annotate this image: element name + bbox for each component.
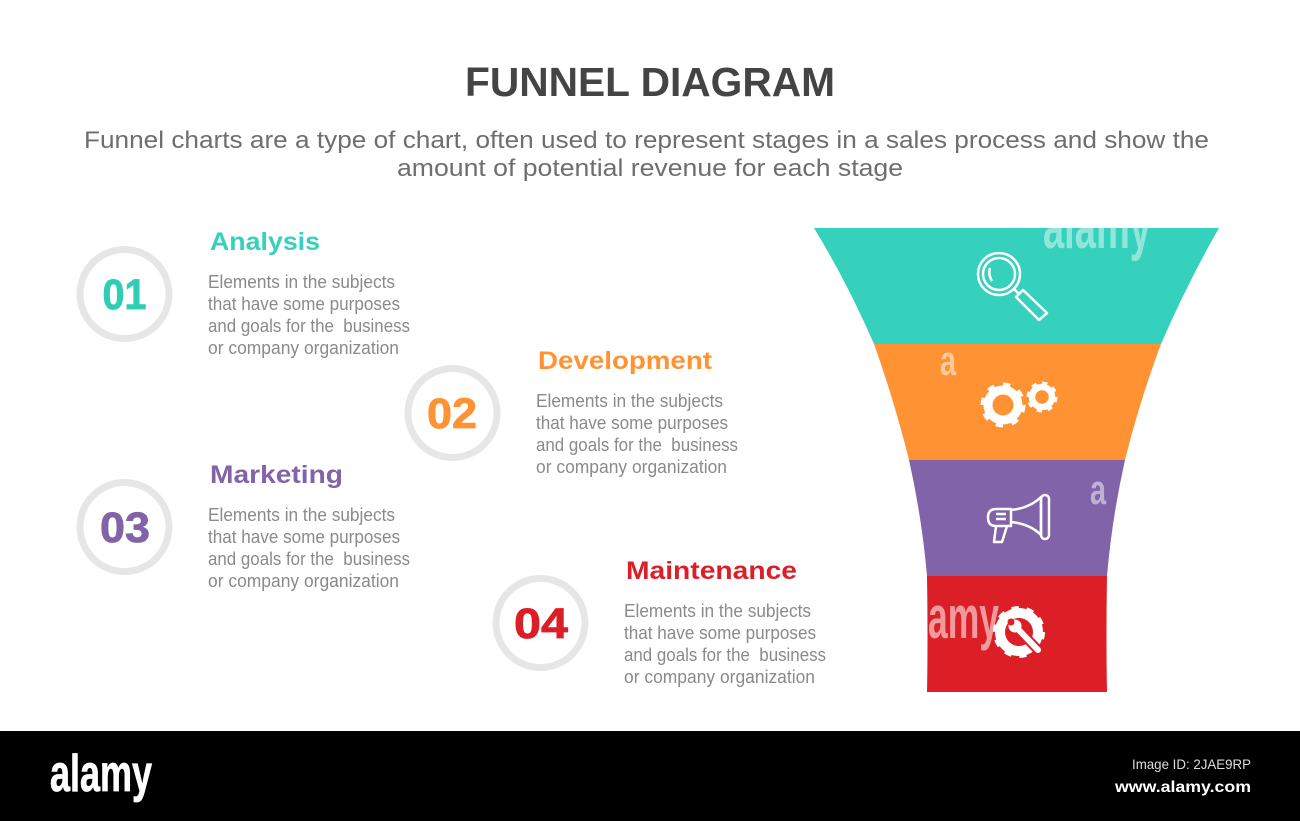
heading: marketing: Marketing (210, 461, 343, 489)
description 01: Elements in the subjects (208, 272, 395, 292)
description 03: and goals for the business (208, 549, 410, 569)
description 02: that have some purposes (536, 413, 728, 433)
description 04: that have some purposes (624, 623, 816, 643)
heading: maintenance: Maintenance (626, 557, 797, 585)
website: www.alamy.com (1114, 779, 1251, 796)
description 03: Elements in the subjects (208, 505, 395, 525)
description 02: or company organization (536, 457, 727, 477)
title: FUNNEL DIAGRAM (465, 59, 835, 105)
watermark letter on purple segment: a (1090, 466, 1106, 513)
number badge 04 (496, 578, 585, 668)
description 04: and goals for the business (624, 645, 826, 665)
item 01: analysis (80, 228, 410, 358)
heading: analysis: Analysis (210, 228, 320, 256)
subtitle (84, 127, 1209, 182)
watermark on red segment: amy (928, 584, 999, 651)
description 01: that have some purposes (208, 294, 400, 314)
item 03: marketing (80, 461, 410, 591)
number badge 03: 03 (100, 504, 150, 552)
description 01: and goals for the business (208, 316, 410, 336)
icon: gear with wrench (996, 608, 1042, 656)
description 02: Elements in the subjects (536, 391, 723, 411)
number badge 03 (80, 482, 169, 572)
funnel segment: red (927, 576, 1107, 692)
icon: megaphone (988, 495, 1049, 542)
funnel segment: teal (814, 228, 1219, 344)
number badge 04: 04 (514, 600, 568, 648)
number badge 01 (80, 250, 169, 338)
funnel segment: purple (909, 460, 1125, 576)
heading: development: Development (538, 347, 713, 375)
number badge 02 (408, 368, 497, 458)
funnel chart (814, 193, 1219, 692)
footer bar (0, 731, 1300, 821)
description 04 (624, 601, 826, 687)
description 03: that have some purposes (208, 527, 400, 547)
funnel segment: orange (874, 344, 1161, 460)
subtitle: Funnel charts are a type of chart, often used to represent stages in a sales process and show the (84, 127, 1209, 154)
number badge 02: 02 (427, 390, 477, 438)
description 02 (536, 391, 738, 477)
description 01: or company organization (208, 338, 399, 358)
description 03 (208, 505, 410, 591)
subtitle: amount of potential revenue for each stage (397, 155, 903, 182)
item 04: maintenance (496, 557, 826, 687)
description 04: Elements in the subjects (624, 601, 811, 621)
watermark letter on orange segment: a (940, 337, 956, 384)
description 02: and goals for the business (536, 435, 738, 455)
footer logo: alamy (50, 745, 152, 803)
number badge 01: 01 (102, 271, 146, 319)
image id: Image ID: 2JAE9RP (1132, 756, 1251, 772)
description 01 (208, 272, 410, 358)
icon: magnifying glass (978, 253, 1047, 320)
item 02: development (408, 347, 738, 477)
icon: gears (983, 384, 1056, 425)
description 03: or company organization (208, 571, 399, 591)
description 04: or company organization (624, 667, 815, 687)
